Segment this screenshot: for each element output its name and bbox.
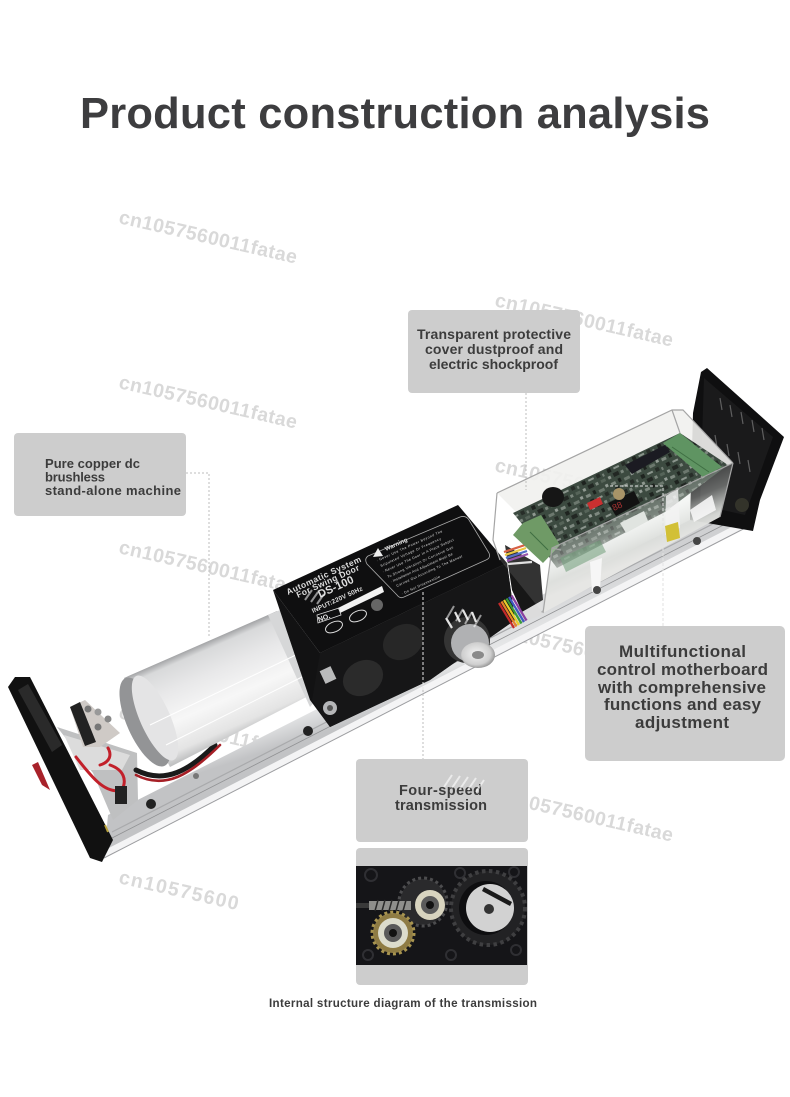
callout: transmission: transmission — [395, 798, 487, 814]
ribbon cables — [499, 545, 543, 628]
black label plate: Carried Out According To The Manual — [396, 554, 463, 588]
black label plate: To Strong Vibration Or Corrosive Gas — [387, 545, 454, 579]
callout: motor: Pure copper dc — [45, 456, 140, 471]
callout: motor — [14, 433, 186, 516]
transparent cover back wall — [497, 410, 733, 548]
callout: motherboard: with comprehensive — [597, 678, 766, 697]
motor cylinder — [109, 608, 325, 773]
watermarks: cn1057560011fatae — [493, 289, 675, 352]
black label plate: INPUT:220V 50Hz — [311, 585, 365, 615]
silver pulley — [444, 610, 495, 668]
watermarks — [117, 206, 675, 915]
gear: brass — [372, 912, 414, 954]
watermarks: cn1057560011fatae — [117, 701, 299, 764]
left end cap — [8, 677, 113, 862]
leader line: motor — [186, 473, 209, 637]
circuit board — [513, 433, 728, 568]
watermarks: cn1057560011fatae — [117, 536, 299, 599]
black label plate: · Do Not Disassemble — [401, 575, 441, 596]
watermarks: cn1057560011fatae — [493, 454, 675, 517]
watermarks: cn1057560011fatae — [493, 619, 675, 682]
callout: cover — [408, 310, 580, 393]
callout: motherboard: control motherboard — [597, 660, 768, 679]
callout: motherboard: adjustment — [635, 713, 729, 732]
circuit board: 88 — [611, 500, 624, 513]
callout: transmission: Four-speed — [399, 783, 482, 799]
callout: cover: electric shockproof — [429, 356, 558, 372]
worm shaft — [356, 900, 411, 911]
black label plate: Stipulated Voltage Or Frequency — [380, 537, 442, 568]
gear: middle — [399, 878, 447, 926]
callout: cover: cover dustproof and — [425, 341, 563, 357]
caption: Internal structure diagram of the transmission — [269, 997, 537, 1010]
black label plate: DS-100 — [316, 574, 356, 601]
watermarks: cn1057560011fatae — [117, 206, 299, 269]
leader line: motherboard — [610, 486, 663, 626]
black label plate: Automatic System — [285, 554, 363, 597]
black label plate: · Installation And Adjustment Must Be — [390, 552, 453, 584]
leader line: cover — [525, 393, 527, 490]
transparent cover and circuit board — [493, 410, 733, 613]
black label plate: NO. — [317, 613, 331, 624]
callout: motherboard: functions and easy — [604, 695, 762, 714]
panel: gearbox photo — [356, 848, 528, 985]
callout: motherboard: Multifunctional — [619, 642, 746, 661]
watermarks: cn1057560011fatae — [493, 784, 675, 847]
watermarks: cn10575600 — [117, 866, 241, 915]
black label plate: · Never Use The Power Beyond The — [376, 529, 443, 563]
gear: large — [451, 871, 525, 945]
callout: transmission — [356, 759, 528, 842]
black label plate — [273, 505, 507, 653]
black label plate: For Swing Door — [295, 562, 361, 600]
aluminium rail — [103, 492, 753, 858]
callout: motherboard — [585, 626, 785, 761]
black label plate: · Never Use The Door In A Place Subject — [382, 538, 454, 574]
leader line: transmission — [422, 592, 424, 759]
bracket and terminal block — [57, 700, 138, 820]
photo watermark marks — [305, 590, 481, 627]
front pane of cover — [543, 463, 733, 613]
watermarks: cn1057560011fatae — [117, 371, 299, 434]
callout: motor: brushless — [45, 470, 105, 484]
black label plate: Warning — [384, 537, 409, 553]
wires — [76, 745, 220, 804]
callout: cover: Transparent protective — [417, 326, 571, 342]
title: Product construction analysis — [80, 90, 710, 138]
product photo: door operator — [8, 310, 785, 1010]
callout: motor: stand-alone machine — [45, 483, 181, 498]
right end cap — [690, 368, 784, 531]
gearbox — [273, 505, 515, 727]
